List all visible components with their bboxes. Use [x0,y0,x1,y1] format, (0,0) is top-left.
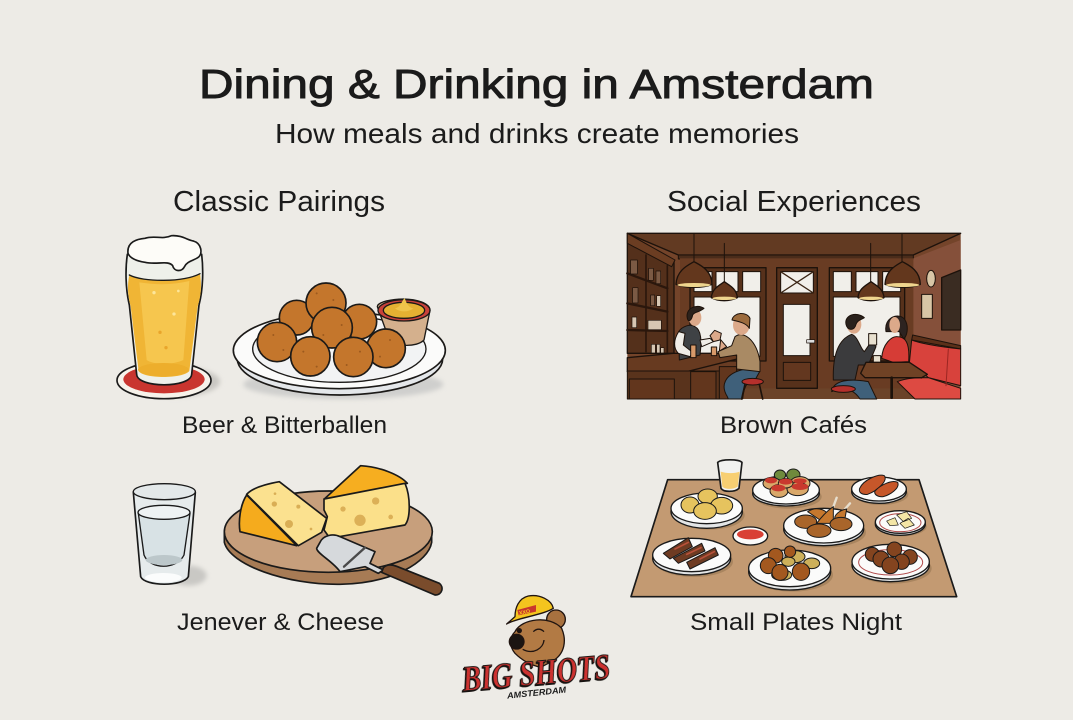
illustration: jenever glass [133,484,207,586]
cheese wedge right [324,466,409,538]
illustration: beer glass on coaster [117,236,220,399]
hard hat: XXO [519,609,531,617]
subtitle: How meals and drinks create memories [275,118,799,149]
cafe walls and ceiling [627,233,961,399]
customer at bar [718,313,763,399]
heading: social experiences: Social Experiences [667,186,921,218]
plate: tomato bites [753,469,822,509]
dip bowl [733,527,768,545]
label: brown cafes: Brown Cafés [720,412,867,439]
logo wordmark: BIG SHOTS [460,646,612,699]
wall decor [922,270,961,330]
table [861,362,927,398]
left window [690,268,766,361]
table top [631,480,957,597]
plate: meatballs with red rim [852,542,932,584]
cheese wedge left [239,482,327,546]
illustration: cheese board with slicer [224,466,442,595]
plate: croquettes and drumsticks [784,498,866,548]
illustration: small plates table [631,460,957,597]
bartender [675,306,721,360]
hard hat [507,596,553,624]
label: small plates night: Small Plates Night [690,609,902,636]
cheese slicer [317,535,442,595]
label: jenever and cheese: Jenever & Cheese [177,609,384,636]
title: Dining & Drinking in Amsterdam [199,61,874,107]
plate: cheese chunks [875,511,927,536]
logo subtext: AMSTERDAM [505,684,567,701]
illustration: bitterballen plate [233,283,445,399]
juice glass [718,460,742,491]
logo: Big Shots Amsterdam bear [460,596,612,701]
plate: grilled meat [653,538,733,577]
plate: meatballs and potatoes [749,546,833,592]
plate: sausages [852,475,908,505]
illustration: brown cafe interior [627,233,961,399]
right window [829,268,905,361]
couple at table [831,314,909,399]
shelves with bottles [627,233,675,353]
red booth [897,335,961,399]
label: beer and bitterballen: Beer & Bitterballen [182,412,387,439]
plate: bread rounds [671,489,745,530]
bear head [509,610,565,667]
bar counter [627,353,741,399]
door [777,268,817,388]
heading: classic pairings: Classic Pairings [173,186,385,218]
pendant lamps [676,233,920,301]
cutting board [224,491,432,584]
